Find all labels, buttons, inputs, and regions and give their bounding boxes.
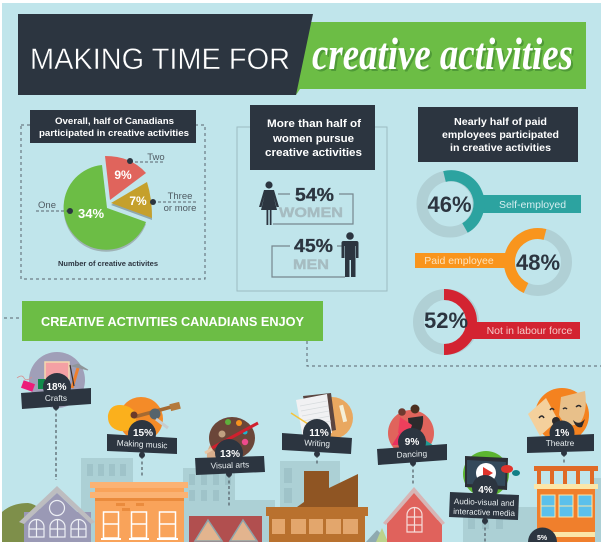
panel heading: in creative activities — [450, 142, 551, 154]
panel heading: Overall, half of Canadians — [55, 116, 174, 127]
small trees — [366, 528, 390, 542]
men stat: MEN — [293, 256, 329, 272]
activity: writing — [282, 393, 353, 457]
building: orange theatre — [528, 466, 598, 542]
activity: visual arts: 13% — [220, 449, 240, 460]
section banner — [22, 301, 323, 341]
activity: audio-visual: interactive media — [453, 507, 516, 518]
title: green panel — [296, 22, 586, 95]
icon: masks — [528, 388, 589, 442]
activity: visual arts: Visual arts — [210, 459, 249, 471]
tree — [2, 503, 55, 542]
panel heading: Nearly half of paid — [454, 116, 547, 128]
activity: dancing: 9% — [405, 437, 419, 448]
pie chart: 34% — [78, 206, 104, 221]
building: purple house — [19, 486, 95, 542]
pie callouts: Three — [168, 191, 192, 202]
pie caption: Number of creative activites — [58, 259, 158, 268]
activity: making music: Making music — [117, 438, 168, 450]
icon: man — [342, 232, 358, 277]
panel heading: More than half of — [267, 118, 361, 130]
donut: not in labour force: Not in labour force — [487, 325, 573, 337]
pin lines — [56, 408, 564, 542]
activity: writing: 11% — [309, 428, 329, 439]
building: orange theatre: 5% — [537, 535, 548, 542]
icon: notepad — [291, 393, 353, 439]
women stat: WOMEN — [279, 204, 343, 220]
panel heading: employees participated — [442, 129, 559, 141]
donut: not in labour force: 52% — [424, 308, 468, 333]
activity: writing: Writing — [304, 437, 331, 449]
pie chart: 7% — [129, 194, 147, 208]
pie callouts: Two — [147, 152, 165, 163]
men stat: 45% — [294, 236, 333, 256]
panel: overall participation — [21, 110, 205, 279]
panel heading — [250, 105, 375, 170]
donut: paid employee: Paid employee — [424, 255, 494, 267]
title: dark panel — [18, 14, 313, 95]
pie chart — [64, 156, 152, 252]
panel: women and men — [237, 105, 387, 291]
donut: not in labour force — [418, 294, 580, 350]
building: red house — [383, 487, 445, 542]
donut: self-employed: 46% — [427, 192, 472, 217]
women stat: 54% — [295, 185, 334, 205]
donut: self-employed — [422, 176, 581, 232]
activity: audio-visual: Audio-visual and — [454, 497, 515, 508]
activity: dancing — [377, 404, 447, 466]
panel heading — [30, 110, 196, 143]
section banner: CREATIVE ACTIVITIES CANADIANS ENJOY — [41, 314, 304, 329]
activity: theatre: 1% — [555, 428, 569, 439]
activity: audio-visual — [449, 451, 520, 524]
panel heading: creative activities — [265, 147, 362, 159]
activity: dancing: Dancing — [396, 448, 428, 460]
donut: paid employee — [415, 234, 566, 290]
icon: video screen — [463, 451, 520, 497]
donut: self-employed: Self-employed — [499, 199, 566, 211]
activity: theatre: Theatre — [546, 438, 575, 448]
icon: dancers — [388, 404, 434, 456]
building: red roof — [189, 516, 262, 542]
title banner — [18, 14, 586, 95]
activity: audio-visual: 4% — [478, 485, 493, 496]
connector lines — [4, 318, 601, 366]
icon: crafts — [17, 352, 88, 408]
activity: crafts — [17, 352, 91, 410]
icon: guitar — [108, 397, 181, 441]
activity: crafts: Crafts — [45, 393, 67, 403]
activity: visual arts — [195, 417, 265, 477]
pie chart: 9% — [114, 168, 132, 182]
women stat — [279, 185, 343, 220]
building: brown — [266, 471, 368, 542]
men stat — [293, 236, 333, 272]
panel heading: women pursue — [272, 133, 354, 145]
panel heading: participated in creative activities — [39, 128, 189, 139]
panel heading — [418, 107, 578, 162]
background skyline — [81, 458, 601, 542]
activity: theatre — [527, 388, 594, 456]
activity: crafts: 18% — [46, 382, 67, 393]
icon: palette — [205, 417, 258, 460]
activity: making music — [107, 397, 181, 458]
title: making time for: MAKING TIME FOR — [30, 43, 290, 76]
pie callouts: or more — [164, 203, 196, 214]
pie callouts — [36, 152, 197, 214]
activity: making music: 15% — [133, 428, 153, 439]
pie callouts: One — [38, 200, 56, 211]
building: orange shop — [90, 482, 188, 542]
donut: paid employee: 48% — [516, 250, 560, 275]
panel: employment — [415, 107, 581, 350]
icon: woman — [259, 181, 279, 225]
